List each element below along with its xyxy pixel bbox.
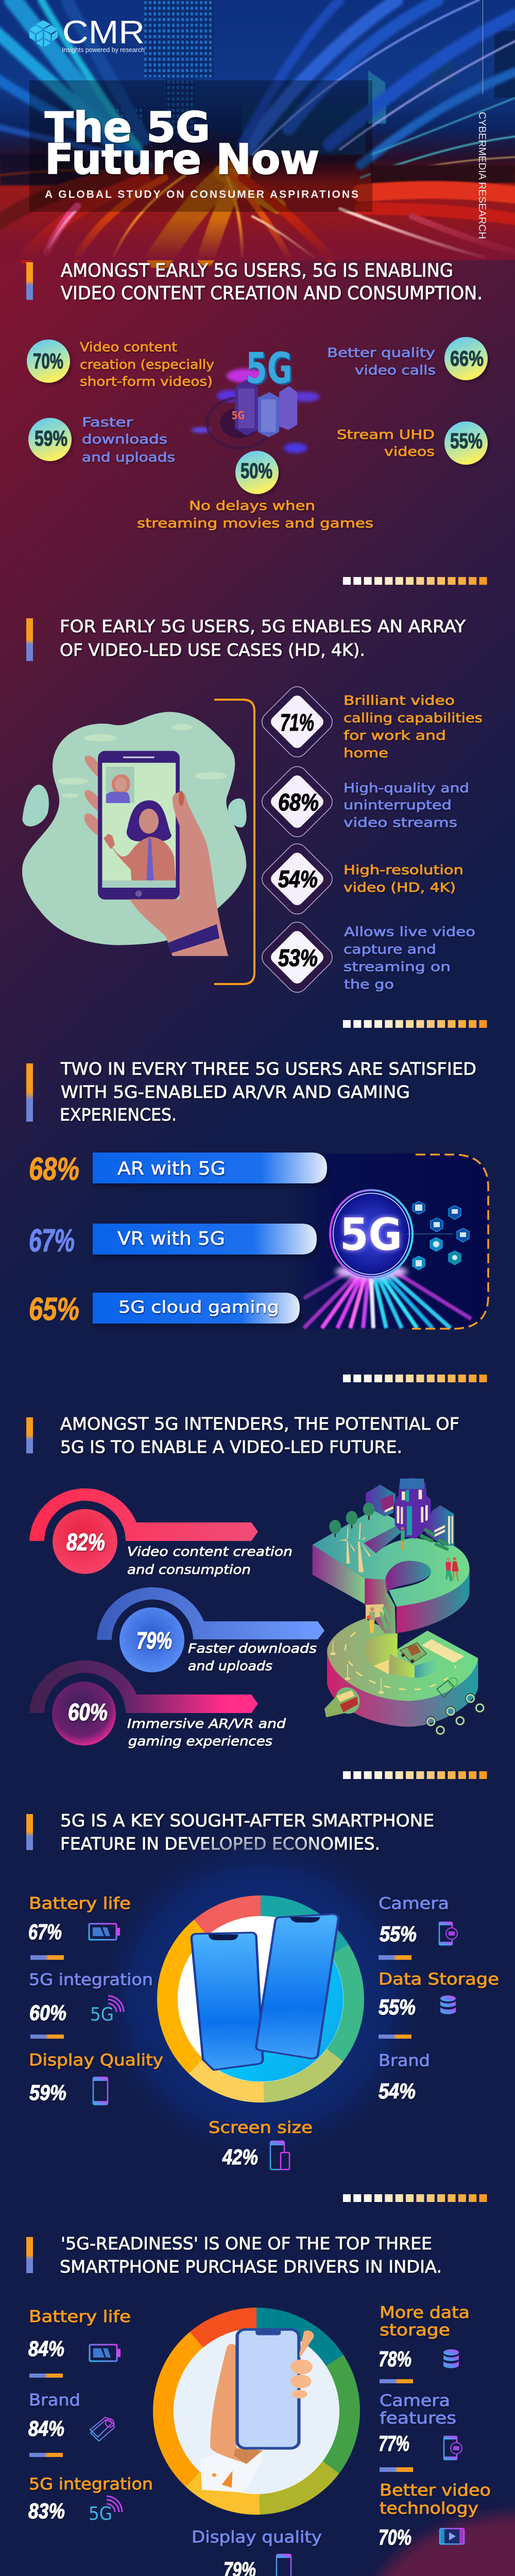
glowing circle: [331, 1192, 411, 1276]
benches: [420, 1528, 449, 1551]
driver: better video technology 70%: 70%: [379, 2525, 411, 2549]
crosswalk: [422, 1639, 465, 1663]
driver: camera features 77%: Camera: [380, 2392, 450, 2410]
icon: phone camera: [439, 1922, 457, 1945]
stat 53% live video capture: 53%: [278, 944, 318, 971]
section 3 heading: WITH 5G-ENABLED AR/VR AND GAMING: [61, 1082, 410, 1102]
ring chart with hand holding phone: [163, 2318, 350, 2504]
right building: [426, 1505, 454, 1546]
couple: [445, 1557, 459, 1582]
stat 79% faster downloads: and uploads: [188, 1658, 272, 1673]
road dashes: [345, 1632, 456, 1689]
driver: 5G integration 83%: [28, 2475, 153, 2524]
bar AR with 5G 68%: 68%: [29, 1151, 79, 1187]
stat 68% uninterrupted video streams: 68%: [278, 789, 319, 816]
icon: database: [443, 2349, 459, 2368]
bar VR with 5G 67%: VR with 5G: [117, 1228, 225, 1249]
feature: battery life 67%: 67%: [28, 1920, 62, 1944]
stat: 55% stream UHD videos: 55%: [450, 429, 483, 453]
driver: brand 84%: Brand: [29, 2391, 80, 2410]
stat 82% video content creation: and consumption: [127, 1562, 251, 1577]
stat 54% high-resolution video: video (HD, 4K): [344, 880, 456, 895]
light rays: [304, 1266, 471, 1328]
feature: data storage 55%: Data Storage: [379, 1970, 499, 1989]
section 5 heading: [26, 1810, 434, 1854]
main tower: [395, 1478, 431, 1539]
section 5 heading: FEATURE IN DEVELOPED ECONOMIES.: [60, 1834, 380, 1854]
divider squares: [343, 577, 487, 585]
section 3 heading: TWO IN EVERY THREE 5G USERS ARE SATISFIED: [60, 1059, 476, 1079]
stat 60% immersive AR/VR: gaming experiences: [128, 1734, 272, 1749]
feature: brand 54%: 54%: [379, 2079, 416, 2103]
stat: 59% faster downloads: Faster: [82, 415, 133, 430]
3D 5G letters: 5G: [246, 344, 293, 393]
dashed frame: [412, 1155, 488, 1329]
icon: phone: [93, 2077, 108, 2105]
trees: [329, 1503, 374, 1537]
wristband: [167, 924, 219, 953]
lower 5 side: [327, 1650, 478, 1727]
stat: 70% video content creation: [27, 340, 214, 389]
icon: battery: [90, 2345, 121, 2361]
stat: 70% video content creation: short-form videos): [80, 374, 213, 389]
driver: camera features 77%: 77%: [379, 2431, 409, 2455]
divider squares: [343, 2194, 487, 2202]
feature: camera 55%: [379, 1894, 457, 1960]
woman on screen: [127, 800, 171, 841]
driver: more data storage 78%: More data: [380, 2303, 470, 2322]
icon: database: [440, 1995, 456, 2014]
feature: camera 55%: 55%: [380, 1922, 417, 1946]
divider squares: [343, 1020, 487, 1028]
driver: brand 84%: [28, 2391, 114, 2457]
driver: battery life 84%: 84%: [28, 2336, 64, 2361]
driver: battery life 84%: [28, 2308, 131, 2378]
section 5 heading: 5G IS A KEY SOUGHT-AFTER SMARTPHONE: [60, 1810, 434, 1831]
phone: [98, 751, 180, 900]
icon: two phones: [270, 2141, 289, 2170]
driver: better video technology 70%: [379, 2481, 491, 2549]
hand and phone: [200, 2329, 314, 2493]
driver: 5G integration 83%: 5G integration: [29, 2475, 153, 2494]
red and orange streaks: [0, 155, 515, 258]
stat 54% high-resolution video: 54%: [278, 866, 318, 892]
title: Future Now: [45, 135, 319, 183]
feature: 5G integration 60%: [29, 1971, 153, 2039]
stat: 50% no delays: [137, 451, 373, 531]
feature: brand 54%: [379, 2052, 430, 2103]
icon: 5G signal: [89, 2496, 122, 2524]
bar VR with 5G 67%: [29, 1223, 317, 1259]
divider squares: [343, 1375, 487, 1382]
icon: 5G signal: 5G: [89, 2503, 112, 2524]
stat: 66% better quality video calls: 66%: [450, 346, 484, 370]
stat 53% live video capture: [258, 918, 475, 996]
stat 79% faster downloads: [97, 1587, 324, 1673]
icon: price tag: [90, 2417, 114, 2441]
stat 71% brilliant video calling: for work and: [344, 728, 446, 743]
stat 68% uninterrupted video streams: High-quality and: [344, 781, 469, 795]
bar 5G cloud gaming 65%: 65%: [29, 1292, 79, 1327]
title panel: [29, 80, 372, 212]
CMR logo: CMR: [62, 14, 145, 50]
title: The 5G: [45, 104, 210, 151]
upper 5 side walls: [313, 1545, 365, 1604]
driver: brand 84%: 84%: [28, 2416, 64, 2441]
mint blob: [22, 712, 246, 945]
isometric 5 city illustration: [313, 1478, 485, 1735]
phone right: [256, 1914, 338, 2058]
driver: more data storage 78%: 78%: [379, 2347, 411, 2371]
bar 5G cloud gaming 65%: 5G cloud gaming: [118, 1297, 279, 1317]
subtitle: A GLOBAL STUDY ON CONSUMER ASPIRATIONS: [45, 189, 358, 200]
section 1 heading: VIDEO CONTENT CREATION AND CONSUMPTION.: [61, 283, 483, 304]
section 2 heading: FOR EARLY 5G USERS, 5G ENABLES AN ARRAY: [60, 616, 466, 636]
icon: cube cluster: [29, 20, 58, 47]
stat 53% live video capture: capture and: [344, 942, 436, 957]
ring chart with two phones: [88, 1826, 433, 2172]
stat 54% high-resolution video: High-resolution: [344, 862, 464, 877]
section 6 heading: [26, 2233, 442, 2277]
ring segments: [167, 1906, 354, 2092]
feature: 5G integration 60%: 5G integration: [29, 1971, 153, 1989]
bar VR with 5G 67%: 67%: [29, 1223, 75, 1259]
stat 71% brilliant video calling: 71%: [280, 709, 314, 736]
section 1 heading: [26, 260, 483, 304]
section 4 heading: 5G IS TO ENABLE A VIDEO-LED FUTURE.: [60, 1437, 402, 1457]
stat 54% high-resolution video: [258, 840, 464, 918]
section 4 heading: [26, 1414, 459, 1457]
hero photo: light trails: [0, 0, 515, 260]
stat: 70% video content creation: 70%: [33, 349, 63, 373]
street lamps: [331, 1641, 384, 1693]
stat 60% immersive AR/VR: [29, 1660, 286, 1749]
driver: better video technology 70%: technology: [380, 2499, 478, 2518]
section 6 heading: '5G-READINESS' IS ONE OF THE TOP THREE: [61, 2233, 432, 2253]
section 6 heading: SMARTPHONE PURCHASE DRIVERS IN INDIA.: [60, 2257, 442, 2277]
feature: data storage 55%: 55%: [379, 1995, 416, 2019]
stat: 55% stream UHD videos: videos: [384, 444, 435, 459]
wind turbines: [338, 1523, 371, 1572]
stat: 59% faster downloads: [28, 415, 175, 465]
CMR logo: [29, 14, 145, 54]
stat: 66% better quality video calls: video calls: [355, 363, 436, 378]
section 3 heading: [26, 1059, 476, 1125]
fingers behind phone: [84, 756, 100, 837]
feature: battery life 67%: Battery life: [29, 1894, 131, 1913]
driver: more data storage 78%: storage: [380, 2321, 450, 2340]
feature: camera 55%: Camera: [379, 1894, 449, 1913]
blue streaks: [0, 0, 515, 165]
caller inset: [106, 767, 134, 803]
stat 68% uninterrupted video streams: [258, 762, 469, 841]
stat: 50% no delays: No delays when: [189, 498, 315, 513]
driver: display quality 79%: [192, 2528, 322, 2576]
driver: camera features 77%: features: [380, 2409, 456, 2428]
stat: 59% faster downloads: and uploads: [82, 450, 175, 465]
icon: phone: [277, 2554, 291, 2576]
title: [45, 104, 319, 183]
section 4 heading: AMONGST 5G INTENDERS, THE POTENTIAL OF: [60, 1414, 459, 1434]
upper 5 top: [313, 1509, 470, 1606]
icon: phone camera: [444, 2436, 462, 2460]
stairs and door: [366, 1604, 384, 1619]
icon: 5G signal: [90, 1996, 124, 2025]
bicycles: [426, 1693, 485, 1735]
icon: battery: [89, 1924, 120, 1940]
feature: display quality 59%: [29, 2051, 163, 2105]
feature: display quality 59%: Display Quality: [29, 2051, 163, 2070]
person walking: [367, 1607, 375, 1633]
feature: screen size 42%: [209, 2119, 313, 2170]
phone left: [192, 1933, 263, 2070]
stat: 55% stream UHD videos: Stream UHD: [337, 427, 435, 442]
icon: video strip: [440, 2529, 464, 2544]
section 3 heading: EXPERIENCES.: [60, 1105, 177, 1125]
stat 53% live video capture: streaming on: [344, 959, 451, 974]
stat: 50% no delays: streaming movies and games: [137, 516, 373, 531]
stat 79% faster downloads: 79%: [136, 1627, 172, 1654]
CMR logo: Insights powered by research: [62, 46, 145, 54]
stat: 70% video content creation: Video content: [80, 340, 177, 354]
vertical label: Cybermedia Research: CYBERMEDIA RESEARCH: [476, 112, 487, 239]
stat 53% live video capture: the go: [344, 977, 394, 992]
stat 71% brilliant video calling: [258, 683, 483, 761]
video call illustration: [22, 712, 247, 956]
left building: [366, 1485, 396, 1516]
driver: display quality 79%: Display quality: [192, 2528, 322, 2547]
stat 60% immersive AR/VR: 60%: [68, 1699, 108, 1725]
stat 71% brilliant video calling: Brilliant video: [344, 693, 455, 708]
feature: screen size 42%: 42%: [222, 2145, 258, 2169]
bar 5G cloud gaming 65%: [29, 1292, 300, 1327]
bar AR with 5G 68%: AR with 5G: [117, 1158, 226, 1179]
train: [324, 1684, 364, 1717]
city buildings: [88, 0, 515, 155]
icon: 5G signal: 5G: [90, 2004, 114, 2025]
feature: screen size 42%: Screen size: [209, 2119, 313, 2137]
section 2 heading: [26, 616, 466, 661]
section 1 heading: AMONGST EARLY 5G USERS, 5G IS ENABLING: [61, 260, 453, 281]
driver: camera features 77%: [379, 2392, 462, 2472]
feature: 5G integration 60%: 60%: [29, 2001, 66, 2025]
5G network image with dashed frame: 5G: [340, 1209, 402, 1261]
section 2 heading: OF VIDEO-LED USE CASES (HD, 4K).: [60, 640, 365, 660]
bar AR with 5G 68%: [29, 1151, 327, 1187]
price tag: [437, 1678, 457, 1698]
stat: 66% better quality video calls: Better quality: [327, 345, 435, 360]
driver: battery life 84%: Battery life: [29, 2308, 131, 2326]
5G city illustration: [191, 344, 320, 453]
bracket: [214, 700, 254, 984]
feature: brand 54%: Brand: [379, 2052, 430, 2070]
hand: [130, 792, 228, 956]
stat 53% live video capture: Allows live video: [344, 924, 475, 939]
driver: better video technology 70%: Better video: [380, 2481, 491, 2500]
car: [400, 1642, 426, 1663]
stat 60% immersive AR/VR: Immersive AR/VR and: [127, 1716, 286, 1731]
feature: display quality 59%: 59%: [29, 2080, 66, 2105]
divider squares: [343, 1771, 487, 1779]
stat: 70% video content creation: creation (especially: [80, 357, 214, 372]
stat 82% video content creation: [29, 1488, 293, 1577]
stat 71% brilliant video calling: calling capabilities: [344, 710, 483, 725]
stat: 66% better quality video calls: [327, 337, 488, 380]
5G network image with dashed frame: [289, 1154, 488, 1329]
bottom right maroon glow: [366, 2514, 515, 2576]
stat 68% uninterrupted video streams: uninterrupted: [344, 798, 452, 812]
stat: 55% stream UHD videos: [337, 421, 488, 465]
floating app icons: [413, 1201, 469, 1270]
stat 79% faster downloads: Faster downloads: [188, 1641, 317, 1656]
stat 68% uninterrupted video streams: video streams: [344, 815, 457, 830]
driver: 5G integration 83%: 83%: [28, 2499, 65, 2523]
lower 5 top road: [327, 1619, 478, 1701]
stat 71% brilliant video calling: home: [344, 745, 388, 760]
stat 82% video content creation: 82%: [66, 1529, 105, 1555]
ring segments: [163, 2318, 350, 2504]
stat: 59% faster downloads: downloads: [82, 432, 167, 447]
stat: 50% no delays: 50%: [241, 459, 272, 483]
driver: more data storage 78%: [379, 2303, 470, 2383]
standing person: [401, 1527, 405, 1550]
stat: 59% faster downloads: 59%: [35, 426, 67, 450]
stat 82% video content creation: Video content creation: [127, 1544, 293, 1559]
5G city illustration: 5G: [232, 409, 245, 422]
feature: battery life 67%: [28, 1894, 131, 1960]
feature: data storage 55%: [379, 1970, 499, 2039]
